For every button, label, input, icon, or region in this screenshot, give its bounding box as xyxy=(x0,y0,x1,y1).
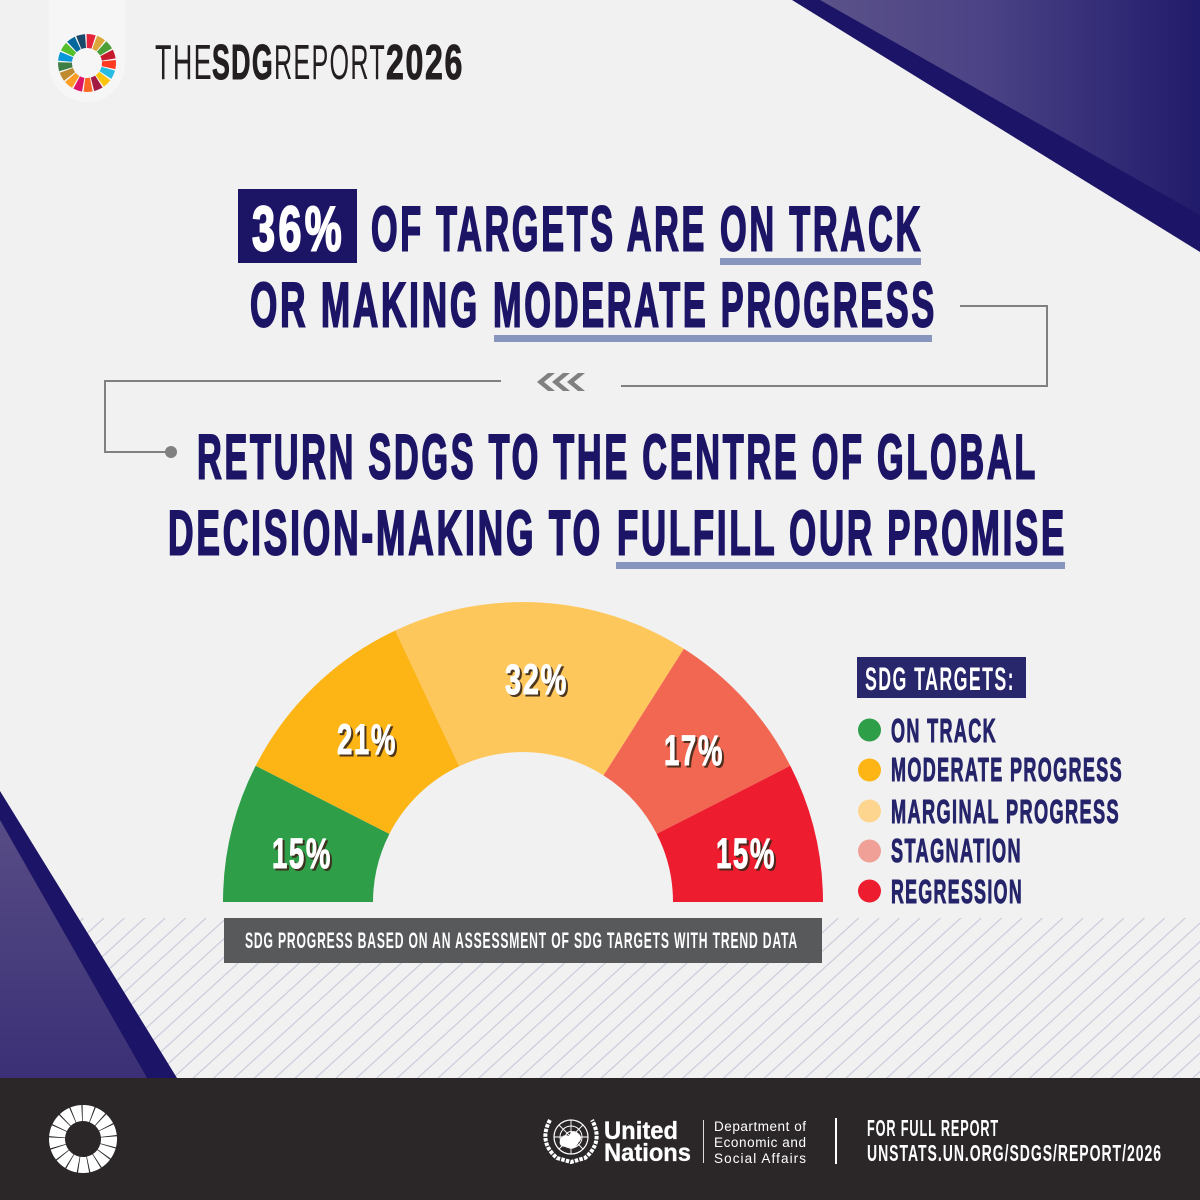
36% highlight box xyxy=(238,189,357,264)
legend item: regression xyxy=(858,873,1023,910)
legend xyxy=(857,657,1123,910)
legend item: stagnation: STAGNATION xyxy=(891,832,1022,869)
report title xyxy=(155,36,464,90)
icon: UN emblem xyxy=(545,1120,597,1162)
legend item: on track: ON TRACK xyxy=(891,712,997,749)
United Nations wordmark: Nations xyxy=(604,1139,691,1167)
footer xyxy=(0,1078,1200,1200)
heading: 36% of targets on track xyxy=(238,189,937,342)
heading: 36% of targets on track: OR MAKING xyxy=(250,270,480,340)
report link xyxy=(867,1115,1162,1166)
report title: SDG xyxy=(212,36,274,90)
value labels: 15% xyxy=(272,830,332,878)
value labels: 15% xyxy=(716,830,776,878)
segment: moderate progress 21% xyxy=(256,630,459,834)
36% highlight box: 36% xyxy=(252,194,345,264)
report link: FOR FULL REPORT xyxy=(867,1115,999,1141)
report title: THE xyxy=(155,36,213,90)
hatched band xyxy=(0,918,1200,1078)
segment: regression 15% xyxy=(657,766,823,902)
legend item: on track xyxy=(858,712,997,749)
value labels: 17% xyxy=(664,727,724,775)
bottom left corner decoration xyxy=(0,791,177,1078)
department name xyxy=(714,1119,806,1166)
value labels: 32% xyxy=(505,656,568,704)
legend item: stagnation xyxy=(858,832,1022,869)
legend item: regression: REGRESSION xyxy=(891,873,1023,910)
legend item: marginal progress xyxy=(858,793,1120,830)
heading: 36% of targets on track: OF TARGETS ARE xyxy=(371,194,707,264)
department name: Department of xyxy=(714,1119,806,1134)
segment: on track 15% xyxy=(223,766,389,902)
segment: stagnation 17% xyxy=(604,649,790,834)
legend title xyxy=(857,657,1026,698)
legend item: moderate progress xyxy=(858,751,1123,788)
top right corner decoration xyxy=(792,0,1200,252)
value labels xyxy=(272,656,776,878)
report title: 2026 xyxy=(386,36,464,90)
heading: return SDGs to the centre xyxy=(168,422,1067,569)
legend title: SDG TARGETS: xyxy=(865,661,1015,697)
heading: 36% of targets on track: ON TRACK xyxy=(720,194,923,264)
logo tab with SDG wheel xyxy=(49,0,125,102)
value labels: 21% xyxy=(337,716,397,764)
heading: return SDGs to the centre: DECISION-MAKING TO xyxy=(168,498,603,568)
department name: Social Affairs xyxy=(714,1151,806,1166)
United Nations wordmark: United xyxy=(604,1117,678,1145)
connector arrow xyxy=(105,306,1047,458)
segment: marginal progress 32% xyxy=(395,602,684,775)
semicircle chart xyxy=(223,602,823,902)
United Nations wordmark xyxy=(604,1117,691,1167)
report title: REPORT xyxy=(274,36,386,90)
icon: white SDG wheel xyxy=(57,1113,109,1165)
department name: Economic and xyxy=(714,1135,806,1150)
caption bar xyxy=(224,918,822,963)
